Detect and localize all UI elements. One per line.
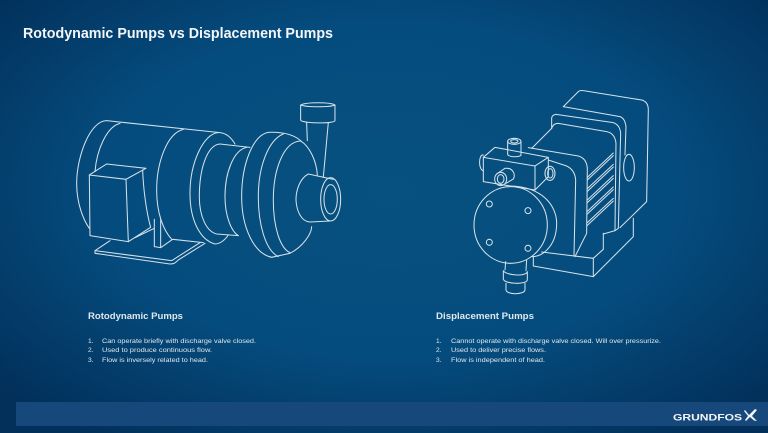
list: rotodynamic pump points: 1. (88, 338, 94, 345)
list: displacement pump points: 3. (436, 357, 442, 364)
list: rotodynamic pump points: Used to produce continuous flow. (102, 347, 212, 354)
list: rotodynamic pump points: Flow is inversely related to head. (102, 357, 208, 364)
title: Rotodynamic Pumps vs Displacement Pumps (23, 26, 333, 42)
icon: rotodynamic pump line drawing (77, 103, 341, 264)
list: displacement pump points: 1. (436, 338, 442, 345)
heading: rotodynamic pumps: Rotodynamic Pumps (88, 311, 183, 322)
list: displacement pump points: Cannot operate with discharge valve closed. Will over pressurize. (451, 338, 661, 345)
logo: Grundfos: GRUNDFOS (673, 412, 742, 422)
heading: displacement pumps: Displacement Pumps (436, 311, 534, 322)
icon: Grundfos mark (744, 409, 757, 421)
list: rotodynamic pump points: 2. (88, 347, 94, 354)
list: rotodynamic pump points: Can operate briefly with discharge valve closed. (102, 338, 256, 345)
icon: displacement pump line drawing (474, 90, 648, 294)
panel: rotodynamic pumps text (88, 311, 256, 364)
logo: Grundfos (673, 409, 757, 422)
list: displacement pump points (436, 338, 661, 364)
panel: displacement pumps text (436, 311, 661, 364)
list: displacement pump points: Flow is independent of head. (451, 357, 545, 364)
list: displacement pump points: 2. (436, 347, 442, 354)
list: displacement pump points: Used to deliver precise flows. (451, 347, 546, 354)
list: rotodynamic pump points: 3. (88, 357, 94, 364)
footer band (16, 402, 768, 426)
list: rotodynamic pump points (88, 338, 256, 364)
